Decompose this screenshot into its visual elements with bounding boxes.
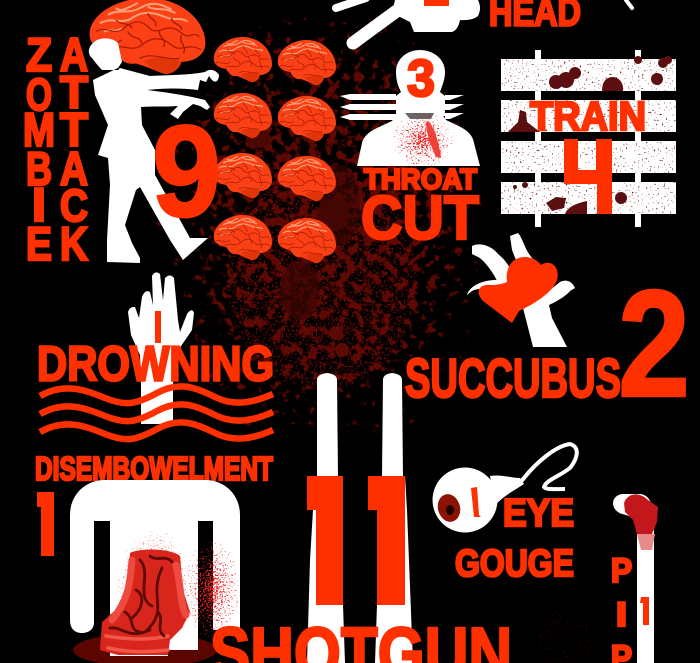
title: attack bbox=[60, 28, 88, 270]
label: disembowelment: DISEMBOWELMENT bbox=[35, 450, 273, 487]
label: gouge: GOUGE bbox=[455, 543, 574, 585]
number: train bbox=[564, 139, 612, 214]
title: zombie: B bbox=[26, 142, 52, 195]
title: attack: T bbox=[60, 67, 88, 118]
title: attack: T bbox=[60, 103, 88, 156]
title: attack: C bbox=[60, 180, 88, 231]
label: throat: THROAT bbox=[364, 164, 477, 196]
title: attack: A bbox=[60, 28, 88, 81]
title: zombie: E bbox=[26, 217, 52, 270]
label: train: TRAIN bbox=[530, 93, 646, 139]
number: shotgun bbox=[307, 476, 405, 605]
number: throat cut: 3 bbox=[407, 50, 435, 108]
icon: succubus hand and heart bbox=[467, 233, 575, 347]
title: attack: K bbox=[60, 217, 88, 270]
title: attack: A bbox=[60, 142, 88, 195]
number: disembowelment bbox=[37, 492, 54, 556]
icon: train tracks bbox=[501, 50, 676, 227]
number: eye gouge bbox=[471, 487, 481, 517]
icon: drowning hand bbox=[128, 272, 194, 424]
label: cut: CUT bbox=[361, 184, 479, 253]
big brain bbox=[90, 0, 205, 74]
label: pipe: I bbox=[616, 596, 627, 634]
icon: eyeball bbox=[432, 444, 577, 532]
zombie silhouette bbox=[89, 38, 219, 263]
number: pipe bbox=[640, 597, 649, 625]
number: zombie attack: 9 bbox=[152, 98, 221, 244]
label: drowning: DROWNING bbox=[37, 338, 274, 392]
icon: head shot gun and hand bbox=[336, 0, 632, 43]
label: pipe: P bbox=[611, 552, 632, 590]
label: eye: EYE bbox=[503, 492, 574, 535]
number: head bbox=[424, 0, 449, 6]
number: drowning bbox=[155, 311, 161, 343]
brain grid bbox=[214, 37, 336, 263]
title: zombie: I bbox=[32, 178, 46, 231]
icon: disembowelment figure bbox=[70, 480, 240, 663]
waves bbox=[40, 386, 273, 439]
icon: shotgun barrels bbox=[307, 373, 413, 663]
title: zombie: O bbox=[26, 69, 52, 120]
label: pipe bbox=[611, 552, 632, 663]
blood splatter background bbox=[150, 0, 591, 663]
title: zombie bbox=[23, 28, 55, 270]
title: zombie: M bbox=[23, 103, 55, 156]
icon: throat cut figure bbox=[340, 50, 480, 168]
icon: lead pipe bbox=[613, 494, 658, 663]
title: zombie: Z bbox=[26, 28, 52, 81]
